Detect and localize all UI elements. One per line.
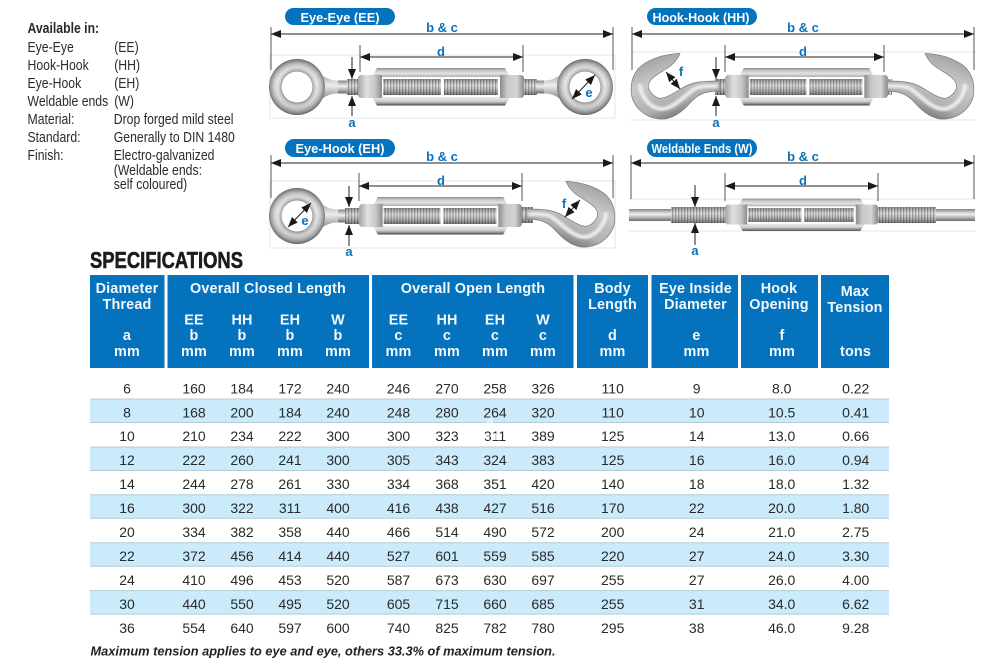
dimension: e: e <box>585 85 593 100</box>
table row: 10 <box>119 428 870 444</box>
table row: 6: 184 <box>230 380 254 396</box>
table row: 20 <box>119 524 870 540</box>
table row: 12 <box>119 452 870 468</box>
table row: 30: 495 <box>278 596 302 612</box>
table row: 8: 8 <box>123 404 131 420</box>
table row: 8: 10 <box>689 404 705 420</box>
table row: 30: 31 <box>689 596 705 612</box>
text block: type list: (HH) <box>114 57 140 73</box>
table row: 14 <box>119 476 870 492</box>
header: diameter thread: Thread <box>103 297 151 313</box>
header: overall open length: EH <box>485 313 505 329</box>
table row: 22: 585 <box>531 548 555 564</box>
dimension: b and c: b & c <box>787 149 819 164</box>
table row: 22: 27 <box>689 548 705 564</box>
dimension: d <box>725 44 884 72</box>
header: overall open length: c <box>539 328 547 344</box>
table row: 30: 715 <box>435 596 459 612</box>
table row: 8: 168 <box>182 404 206 420</box>
table row: 10: 0.66 <box>842 428 870 444</box>
dimension: a: a <box>345 244 353 259</box>
text block: material, standard, finish: (Weldable ends: <box>114 162 202 178</box>
table row: 22 <box>119 548 870 564</box>
text block: type list: Hook-Hook <box>28 57 89 73</box>
icon: eye-eye turnbuckle <box>269 59 613 115</box>
table row: 6: 258 <box>483 380 507 396</box>
header: max tension: Max <box>841 284 869 300</box>
table row: 24: 697 <box>531 572 555 588</box>
table row: 36: 554 <box>182 620 206 636</box>
dimension: d <box>359 173 522 201</box>
table row: 36: 740 <box>387 620 410 636</box>
header: overall closed length: mm <box>181 344 207 360</box>
table header <box>90 275 889 368</box>
table row: 14: 278 <box>230 476 254 492</box>
header: body length: Length <box>588 297 637 313</box>
table row: 22: 24.0 <box>768 548 796 564</box>
table row: 20: 514 <box>435 524 459 540</box>
text block: type list: Eye-Eye <box>28 39 74 55</box>
table row: 6: 110 <box>602 380 624 396</box>
table row: 24: 587 <box>387 572 410 588</box>
table row: 20: 24 <box>689 524 705 540</box>
table row: 20: 20 <box>119 524 135 540</box>
header: overall open length <box>372 275 574 368</box>
icon: eye-hook turnbuckle <box>269 181 615 247</box>
table row: 10: 125 <box>601 428 625 444</box>
table row: 14: 261 <box>278 476 302 492</box>
table row: 10: 10 <box>119 428 135 444</box>
header: overall closed length: b <box>334 328 343 344</box>
table row: 16: 427 <box>483 500 507 516</box>
table row: 20: 200 <box>601 524 625 540</box>
table row: 8: 110 <box>602 404 624 420</box>
table row: 6 <box>123 380 870 396</box>
header: hook opening <box>741 275 818 368</box>
header: overall closed length: b <box>286 328 295 344</box>
header: eye inside diameter <box>652 275 738 368</box>
table row: 16: 516 <box>531 500 555 516</box>
table row: 12: 16 <box>689 452 705 468</box>
table row: 6: 270 <box>435 380 459 396</box>
header: overall closed length: b <box>190 328 199 344</box>
table row: 24 <box>119 572 870 588</box>
table row: 14: 351 <box>483 476 507 492</box>
table row: 10: 300 <box>326 428 350 444</box>
table row: 8: 280 <box>435 404 459 420</box>
text block: material, standard, finish <box>28 111 235 192</box>
dimension: d: d <box>799 173 807 188</box>
dimension: d: d <box>437 173 445 188</box>
table row: 16: 22 <box>689 500 705 516</box>
dimension: a: a <box>348 115 356 130</box>
table row: 24: 496 <box>230 572 254 588</box>
table row: 20: 466 <box>387 524 410 540</box>
table row: 6: 6 <box>123 380 131 396</box>
header: overall open length: EE <box>389 313 408 329</box>
dimension: a <box>712 57 720 130</box>
table row: 8: 240 <box>326 404 350 420</box>
table row: 22: 456 <box>230 548 254 564</box>
dimension: b and c: b & c <box>787 20 819 35</box>
table row: 12: 300 <box>326 452 350 468</box>
table row: 20: 440 <box>326 524 350 540</box>
table row: 24: 24 <box>119 572 135 588</box>
table row: 6: 246 <box>387 380 410 396</box>
table row: 10: 389 <box>531 428 555 444</box>
text block: material, standard, finish: Standard: <box>28 129 81 145</box>
table row: 30: 6.62 <box>842 596 870 612</box>
header: overall closed length: b <box>238 328 247 344</box>
table row: 14: 244 <box>182 476 206 492</box>
text block: material, standard, finish: Finish: <box>28 147 64 163</box>
table row bands <box>90 399 889 614</box>
table row: 14: 14 <box>119 476 135 492</box>
table row: 16: 170 <box>601 500 625 516</box>
table row: 16: 16 <box>119 500 135 516</box>
header: overall open length: mm <box>386 344 411 360</box>
header: overall closed length: mm <box>325 344 351 360</box>
icon: weldable turnbuckle <box>629 199 975 231</box>
table row: 6: 240 <box>326 380 350 396</box>
table row: 12: 343 <box>435 452 459 468</box>
icon: hook-hook turnbuckle <box>631 53 974 119</box>
table row: 30 <box>119 596 870 612</box>
table row: 14: 368 <box>435 476 459 492</box>
text block: material, standard, finish: self coloured) <box>114 176 187 192</box>
dimension: b and c: b & c <box>426 20 458 35</box>
header: overall open length: mm <box>530 344 556 360</box>
table row: 24: 453 <box>278 572 302 588</box>
header: overall closed length: Overall Closed Length <box>190 281 346 297</box>
table row: 10: 300 <box>387 428 410 444</box>
header: eye inside diameter: Diameter <box>664 297 727 313</box>
table row: 16: 416 <box>387 500 410 516</box>
header: overall open length: mm <box>434 344 460 360</box>
table row: 16: 400 <box>326 500 350 516</box>
table row: 20: 382 <box>230 524 254 540</box>
table row: 8: 264 <box>483 404 507 420</box>
dimension: a: a <box>712 115 720 130</box>
table row: 22: 440 <box>326 548 350 564</box>
table row: 10: 14 <box>689 428 705 444</box>
table row: 24: 410 <box>182 572 206 588</box>
table row: 20: 572 <box>531 524 555 540</box>
dimension: a: a <box>691 243 699 258</box>
dimension: a <box>348 57 356 130</box>
label pill: Eye-Eye (EE): Eye-Eye (EE) <box>300 10 380 25</box>
text block: type list: Eye-Hook <box>28 75 82 91</box>
table row: 12: 0.94 <box>842 452 870 468</box>
header: overall closed length: EH <box>280 313 300 329</box>
table row: 22: 220 <box>601 548 625 564</box>
table row: 36: 640 <box>230 620 254 636</box>
header: body length: Body <box>594 281 631 297</box>
table row: 10: 234 <box>230 428 254 444</box>
label pill: Hook-Hook (HH): Hook-Hook (HH) <box>652 10 750 25</box>
table row: 36: 46.0 <box>768 620 796 636</box>
text block: type list: Weldable ends <box>28 93 109 109</box>
table row: 30: 440 <box>182 596 206 612</box>
header: body length <box>577 275 648 368</box>
table row: 8: 320 <box>531 404 555 420</box>
table row: 8 <box>123 404 870 420</box>
table row: 20: 334 <box>182 524 206 540</box>
dimension: d: d <box>437 44 445 59</box>
table row: 14: 140 <box>601 476 625 492</box>
header: eye inside diameter: e <box>692 328 701 344</box>
header: overall closed length: mm <box>229 344 255 360</box>
header: overall closed length: EE <box>184 313 204 329</box>
table row: 12: 16.0 <box>768 452 796 468</box>
dimension: f <box>562 196 580 217</box>
header: body length: mm <box>600 344 625 360</box>
panel: availability and material details <box>28 20 235 192</box>
table row: 10: 323 <box>435 428 459 444</box>
table row: 36: 825 <box>435 620 459 636</box>
header: diameter thread: Diameter <box>96 281 159 297</box>
dimension: e <box>572 75 595 100</box>
table row: 16 <box>119 500 870 516</box>
header: overall open length: HH <box>436 313 458 329</box>
table row: 6: 8.0 <box>772 380 792 396</box>
table row: 8: 10.5 <box>768 404 796 420</box>
header: overall open length: c <box>491 328 499 344</box>
table row: 8: 184 <box>278 404 302 420</box>
table row: 12: 383 <box>531 452 555 468</box>
table row: 14: 18.0 <box>768 476 796 492</box>
table row: 14: 334 <box>387 476 410 492</box>
table row: 30: 255 <box>601 596 625 612</box>
table row: 16: 311 <box>279 500 301 516</box>
table row: 30: 550 <box>230 596 254 612</box>
header: max tension: tons <box>840 344 871 360</box>
table row: 24: 27 <box>689 572 705 588</box>
dimension: d <box>360 44 523 72</box>
dimension: b and c <box>632 20 974 70</box>
panel: Eye-Hook diagram <box>269 139 615 259</box>
label pill: Eye-Eye (EE) <box>285 8 395 25</box>
header: diameter thread: mm <box>114 344 140 360</box>
heading: specifications: SPECIFICATIONS <box>90 247 243 273</box>
panel: Weldable Ends diagram <box>629 139 976 258</box>
header: max tension <box>821 275 889 368</box>
table row: 12: 305 <box>387 452 410 468</box>
dimension: b and c <box>631 149 974 199</box>
table row: 6: 9 <box>693 380 701 396</box>
table row: 36: 36 <box>119 620 135 636</box>
table row: 36: 600 <box>326 620 350 636</box>
table row: 8: 0.41 <box>842 404 870 420</box>
table row: 22: 3.30 <box>842 548 870 564</box>
label pill: Eye-Hook (EH) <box>285 139 395 157</box>
text block: type list: (W) <box>114 93 134 109</box>
table row: 22: 559 <box>483 548 507 564</box>
table row: 12: 241 <box>278 452 302 468</box>
panel: Eye-Eye diagram <box>269 8 615 130</box>
stray ghost header text over 311 <box>478 414 502 443</box>
header: eye inside diameter: mm <box>684 344 709 360</box>
table row: 12: 324 <box>483 452 507 468</box>
dimension: a <box>691 185 699 258</box>
table row: 14: 420 <box>531 476 555 492</box>
table row: 22: 372 <box>182 548 206 564</box>
table row: 10: 222 <box>278 428 302 444</box>
table row: 36: 295 <box>601 620 625 636</box>
table row: 24: 630 <box>483 572 507 588</box>
table row: 16: 438 <box>435 500 459 516</box>
text block: type list <box>28 39 140 109</box>
dimension: a <box>345 186 353 259</box>
table row: 16: 300 <box>182 500 206 516</box>
header: overall open length: mm <box>482 344 508 360</box>
dimension: f: f <box>562 196 567 211</box>
table row: 30: 520 <box>326 596 350 612</box>
table row: 16: 322 <box>230 500 254 516</box>
table row: 24: 520 <box>326 572 350 588</box>
text block: type list: (EE) <box>114 39 139 55</box>
table row: 14: 330 <box>326 476 350 492</box>
table row: 24: 673 <box>435 572 459 588</box>
header: hook opening: mm <box>769 344 795 360</box>
table row: 22: 601 <box>435 548 459 564</box>
table row: 12: 125 <box>601 452 625 468</box>
header: body length: d <box>608 328 617 344</box>
table row: 36: 9.28 <box>842 620 870 636</box>
label pill: Eye-Hook (EH): Eye-Hook (EH) <box>296 141 384 156</box>
header: overall closed length: HH <box>231 313 253 329</box>
table row: 22: 414 <box>278 548 302 564</box>
stray ghost header text over 311: a <box>487 414 494 428</box>
dimension: b and c <box>271 20 613 70</box>
table row: 36: 597 <box>278 620 302 636</box>
header: overall closed length: mm <box>277 344 303 360</box>
text block: material, standard, finish: Material: <box>28 111 74 127</box>
table row: 30: 685 <box>531 596 555 612</box>
table row: 36: 38 <box>689 620 705 636</box>
table row: 24: 26.0 <box>768 572 796 588</box>
table row: 6: 0.22 <box>842 380 870 396</box>
table row: 36: 782 <box>483 620 507 636</box>
table row: 20: 21.0 <box>768 524 796 540</box>
table row: 10: 311 <box>484 428 506 444</box>
table row: 12: 12 <box>119 452 135 468</box>
table row: 30: 34.0 <box>768 596 796 612</box>
text block: material, standard, finish: Electro-galvanized <box>114 147 214 163</box>
table row: 24: 255 <box>601 572 625 588</box>
table row: 30: 605 <box>387 596 410 612</box>
header: overall open length: Overall Open Length <box>401 281 545 297</box>
table row: 16: 20.0 <box>768 500 796 516</box>
table row: 12: 260 <box>230 452 254 468</box>
header: diameter thread: a <box>123 328 132 344</box>
header: hook opening: Hook <box>761 281 798 297</box>
table row: 20: 358 <box>278 524 302 540</box>
dimension: f: f <box>679 64 684 79</box>
heading: available in: Available in: <box>28 20 99 36</box>
header: overall open length: c <box>394 328 403 344</box>
table row: 16: 1.80 <box>842 500 870 516</box>
table row: 6: 172 <box>278 380 302 396</box>
text block: material, standard, finish: Drop forged mild steel <box>114 111 233 127</box>
table row: 36 <box>119 620 870 636</box>
table row: 12: 222 <box>182 452 206 468</box>
dimension: b and c: b & c <box>426 149 458 164</box>
table row: 6: 160 <box>182 380 206 396</box>
dimension: e: e <box>301 213 309 228</box>
header: diameter thread <box>90 275 164 368</box>
header: hook opening: Opening <box>749 297 809 313</box>
table row: 36: 780 <box>531 620 555 636</box>
table row: 30: 660 <box>483 596 507 612</box>
dimension: d <box>725 173 878 201</box>
dimension: f <box>666 64 684 89</box>
footnote: Maximum tension applies to eye and eye, others 33.3% of maximum tension. <box>90 644 556 658</box>
panel: Hook-Hook diagram <box>631 8 976 130</box>
dimension: e <box>288 203 311 228</box>
dimension: b and c <box>271 149 613 198</box>
stray ghost header text over 311: mm <box>478 428 502 443</box>
header: overall closed length <box>168 275 369 368</box>
header: overall open length: c <box>443 328 451 344</box>
table row: 8: 248 <box>387 404 410 420</box>
header: hook opening: f <box>780 328 785 344</box>
table row: 22: 527 <box>387 548 410 564</box>
header: overall open length: W <box>536 313 550 329</box>
table row: 10: 13.0 <box>768 428 796 444</box>
header: max tension: Tension <box>827 300 883 316</box>
dimension: d: d <box>799 44 807 59</box>
table row: 22: 22 <box>119 548 135 564</box>
text block: type list: (EH) <box>114 75 139 91</box>
header: overall closed length: W <box>331 313 345 329</box>
label pill: Weldable Ends (W): Weldable Ends (W) <box>652 141 752 156</box>
table row: 10: 210 <box>182 428 206 444</box>
header: eye inside diameter: Eye Inside <box>659 281 732 297</box>
table row: 14: 1.32 <box>842 476 870 492</box>
table row: 24: 4.00 <box>842 572 870 588</box>
table row: 20: 490 <box>483 524 507 540</box>
table row: 20: 2.75 <box>842 524 870 540</box>
text block: material, standard, finish: Generally to DIN 1480 <box>114 129 235 145</box>
table row: 6: 326 <box>531 380 555 396</box>
table row: 8: 200 <box>230 404 254 420</box>
table row: 30: 30 <box>119 596 135 612</box>
table row: 14: 18 <box>689 476 705 492</box>
